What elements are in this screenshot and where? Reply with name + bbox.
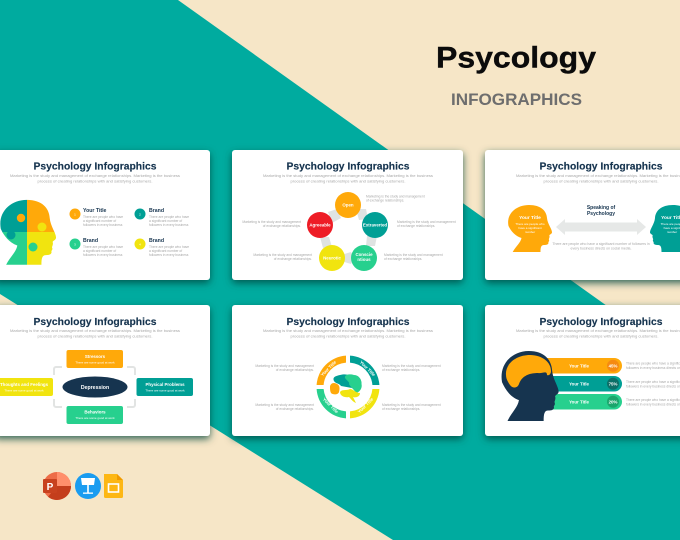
arrow caption [552,242,650,250]
panel: depression [0,305,210,436]
description: process of creating relationships with and satisfying customers. [290,334,406,338]
item 2 [134,208,189,227]
label: top right: of exchange relationships. [366,198,404,202]
item 1 [70,208,123,227]
label: top right: Marketing is the study and management [366,194,425,198]
item 3: Brand [83,238,98,244]
box: behaviors: Behaviors [84,410,106,414]
label: bottom right: of exchange relationships. [384,257,422,261]
connector brackets [54,367,135,407]
bar: 20%: 20% [609,399,617,404]
description [263,328,433,338]
label: bottom right: Marketing is the study and management [384,253,443,257]
icon: teal head [650,205,680,252]
item 2: followers in every business [149,223,189,227]
text row 2 [626,380,680,388]
circle: Agreeable [307,212,333,238]
item 3 [70,238,123,257]
subtitle: INFOGRAPHICS [451,91,582,109]
label: left: of exchange relationships. [263,224,301,228]
bar: 75% [540,376,622,392]
panel: puzzle head [0,150,210,280]
label: lower right [382,403,441,411]
box: physical problems: Physical Problems [145,382,185,387]
icon: teal head: number [667,230,677,234]
label: right: Marketing is the study and management [397,220,456,224]
description: Marketing is the study and management of exchange relationships. Marketing is the business [516,328,680,333]
item 4: followers in every business [149,253,189,257]
label: bottom left: of exchange relationships. [274,257,312,261]
label: upper right: of exchange relationships. [382,368,420,372]
icon: teal head: have a signif [664,226,680,230]
item 3: 3 [74,242,76,246]
description [10,173,180,183]
item 1: followers in every business [83,223,123,227]
arrow: double headed [556,219,646,235]
item 4: Brand [149,238,164,244]
label: left [242,220,301,228]
description: process of creating relationships with and satisfying customers. [38,334,152,338]
heading: Psychology Infographics [540,160,663,172]
box: thoughts and feelings [0,378,53,396]
label: lower right: of exchange relationships. [382,407,420,411]
box: stressors [66,350,123,368]
circle: Neurotic: Neurotic [323,256,341,260]
label: lower right: Marketing is the study and management [382,403,441,407]
description [10,328,180,338]
bar: 20% [535,394,622,410]
item 4 [134,238,189,257]
description [516,173,680,183]
item 2: There are people who have [149,215,189,219]
description [516,328,680,338]
label: lower left: of exchange relationships. [276,407,314,411]
description: process of creating relationships with and satisfying customers. [544,334,658,338]
circle: Open [335,192,361,218]
item 4: a significant number of [149,249,182,253]
arrow caption: every business directs on social media. [571,246,631,250]
panel: five traits cycle [232,150,463,280]
item 1: 1 [74,212,76,216]
item 1: Your Title [83,208,107,214]
label: right [397,220,456,228]
heading: Psychology Infographics [286,316,410,328]
circle: Conscientious [351,245,377,271]
box: thoughts and feelings: Thoughts and Feelings [0,382,49,387]
bar: 45%: 45% [609,363,617,368]
description: Marketing is the study and management of exchange relationships. Marketing is the business [516,173,680,178]
icon: Keynote [75,473,101,499]
item 1: a significant number of [83,219,116,223]
label: bottom left [253,253,312,261]
icon: brain [330,374,362,403]
ring labels: Your Title [320,359,338,377]
ring labels: Your Title [357,396,375,414]
panel: speaking of psychology [485,150,680,280]
bar: 20%: Your Title [569,400,589,404]
item 1: There are people who have [83,215,123,219]
circle: Agreeable: Agreeable [309,222,331,228]
label: upper left: Marketing is the study and management [255,364,314,368]
icon: orange head: have a significant [518,226,542,230]
description: Marketing is the study and management of exchange relationships. Marketing is the business [263,328,433,333]
label: lower left: Marketing is the study and management [255,403,314,407]
ring labels: Your Title [322,397,340,415]
icon: orange head: Your Title [519,215,541,221]
panel: brain ring [232,305,463,436]
cycle connectors [320,209,377,264]
icon: navy head [502,351,559,421]
icon: PowerPoint [43,472,71,500]
box: thoughts and feelings: There are some good at work [4,388,44,392]
arrow heading: Psychology [587,211,615,217]
item 2: 2 [139,212,141,216]
description: process of creating relationships with and satisfying customers. [38,178,152,183]
icon: PowerPoint: P [47,482,54,493]
main title: Psycology [436,42,596,74]
circle: Conscientious: Conscie [355,252,373,257]
circle: Extraverted [362,212,388,238]
box: stressors: There are some good at work [75,360,115,364]
box: stressors: Stressors [85,354,106,359]
bar: 75%: 75% [609,381,617,386]
description: Marketing is the study and management of exchange relationships. Marketing is the business [263,173,433,178]
label: bottom right [384,253,443,261]
arrow heading: Speaking of [587,205,616,211]
label: top right [366,194,425,202]
heading: Psychology Infographics [34,160,157,172]
ring labels [320,359,377,415]
arrow caption: There are people who have a significant number of followers in [552,242,650,246]
icon: orange head: number [525,230,535,234]
bar: 45% [540,358,622,374]
item 2: Brand [149,208,164,214]
ellipse: depression [62,376,128,398]
icon: Google Slides [104,474,123,498]
item 3: a significant number of [83,249,116,253]
panel: head with bars [485,305,680,436]
circle: Extraverted: Extraverted [363,222,387,228]
item 3: followers in every business [83,253,123,257]
label: lower left [255,403,314,411]
label: right: of exchange relationships. [397,224,435,228]
description: Marketing is the study and management of exchange relationships. Marketing is the business [10,173,180,178]
icon: orange head: There are people who [515,222,545,226]
box: physical problems [136,378,193,396]
description [263,173,433,183]
box: behaviors [66,406,123,424]
label: upper left: of exchange relationships. [276,368,314,372]
item 3: There are people who have [83,245,123,249]
bar: 75%: Your Title [569,382,589,386]
item 2: a significant number of [149,219,182,223]
item 4: There are people who have [149,245,189,249]
box: physical problems: There are some good at work [145,388,185,392]
ring segments [317,356,379,418]
heading: Psychology Infographics [286,160,410,172]
ring labels: Your Title [359,360,377,378]
description: Marketing is the study and management of exchange relationships. Marketing is the business [10,328,180,333]
ellipse: depression: Depression [81,385,109,391]
circle: Neurotic [319,245,345,271]
heading: Psychology Infographics [34,316,157,328]
text row 3 [626,398,680,406]
icon: orange brain [506,355,551,388]
arrow heading [587,205,616,217]
heading: Psychology Infographics [540,316,663,328]
icon: orange head [508,205,552,252]
item 4: 4 [139,242,141,246]
circle: Open: Open [342,202,354,208]
label: bottom left: Marketing is the study and management [253,253,312,257]
icon: puzzle head [0,200,56,265]
label: upper left [255,364,314,372]
description: process of creating relationships with and satisfying customers. [290,178,406,183]
bar: 45%: Your Title [569,364,589,368]
circle: Conscientious: ntious [357,257,371,262]
description: process of creating relationships with and satisfying customers. [544,178,658,183]
label: upper right: Marketing is the study and management [382,364,441,368]
label: left: Marketing is the study and management [242,220,301,224]
label: upper right [382,364,441,372]
text row 1 [626,362,680,370]
box: behaviors: There are some good at work [75,416,115,420]
